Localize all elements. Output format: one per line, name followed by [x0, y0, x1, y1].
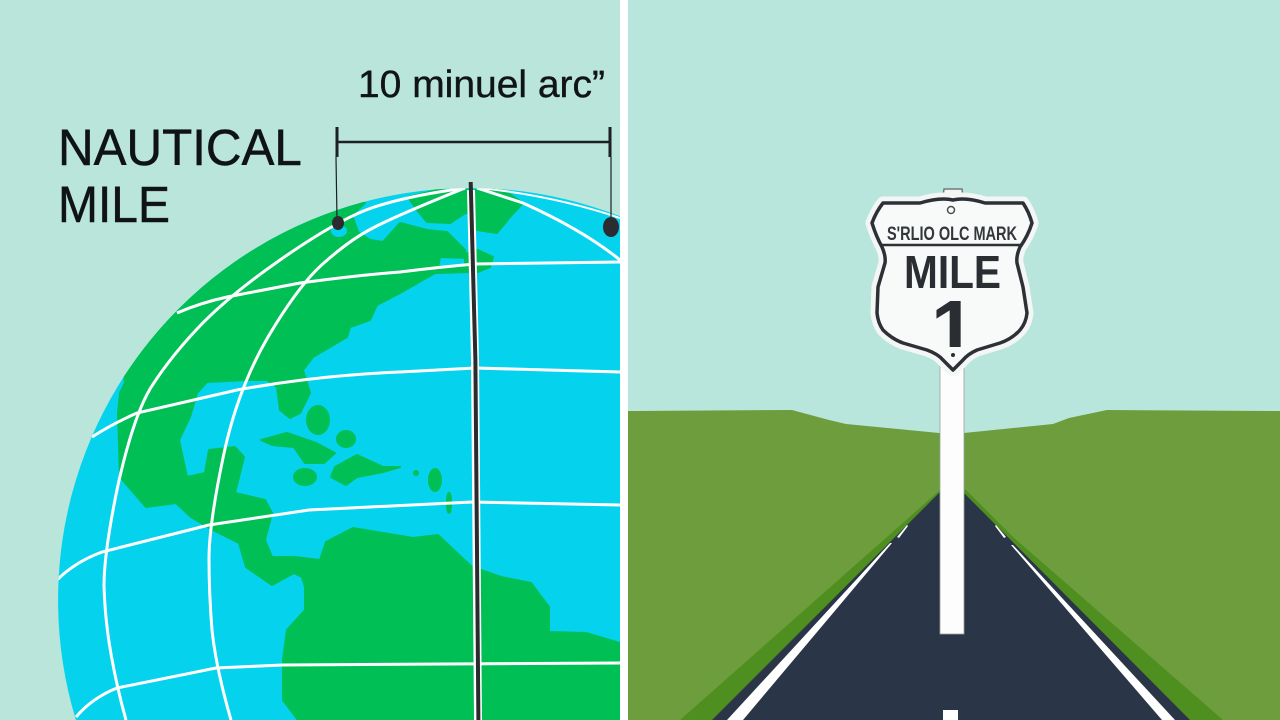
shield [872, 199, 1032, 370]
heading: nautical mile: MILE [58, 176, 170, 233]
land masses [118, 185, 620, 720]
arc label: 10 minuel arc” [358, 64, 605, 106]
measurement bracket [332, 127, 619, 237]
road [680, 490, 1223, 720]
road edge lines [727, 543, 892, 720]
sign number: 1 [931, 284, 976, 373]
sign top hook [943, 189, 963, 196]
heading: nautical mile: NAUTICAL [58, 119, 301, 176]
globe grid lines [57, 188, 620, 720]
ground [628, 410, 1280, 720]
sign rivet [951, 353, 955, 357]
panel: nautical mile [58, 69, 620, 720]
mile sign [872, 189, 1032, 373]
divider [620, 0, 628, 720]
globe central axis [471, 182, 478, 720]
sign post [940, 360, 964, 634]
sign MILE text: MILE [904, 246, 1001, 298]
road centre dash [943, 710, 958, 720]
globe [57, 182, 620, 720]
sign small text: S'RLIO OLC MARK [887, 224, 1017, 245]
panel: statute mile [628, 188, 1280, 720]
